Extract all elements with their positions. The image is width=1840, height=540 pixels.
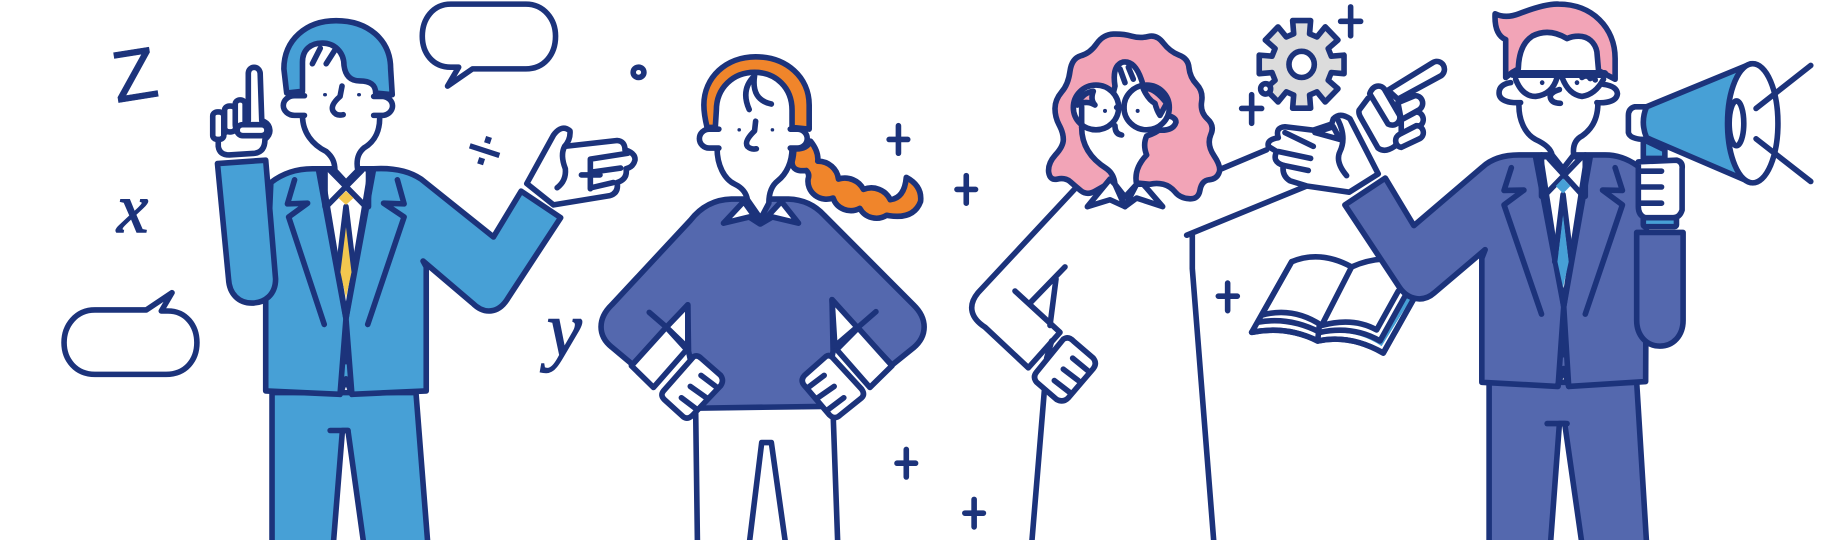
glasses <box>1513 70 1605 78</box>
trousers <box>1489 382 1647 540</box>
nose <box>1550 90 1560 103</box>
neck <box>1519 103 1598 169</box>
ears <box>1499 83 1521 103</box>
left cuff <box>631 327 687 387</box>
megaphone cone <box>1643 64 1751 183</box>
ears <box>283 96 304 115</box>
ear <box>1160 115 1176 130</box>
hair <box>1049 34 1220 199</box>
eyes <box>323 93 327 96</box>
speech bubble: top <box>422 4 556 86</box>
speech bubble: left <box>64 293 197 374</box>
megaphone cap <box>1628 107 1647 139</box>
left sleeve <box>217 160 276 303</box>
character: man in purple suit with megaphone <box>1345 4 1811 540</box>
raised hand <box>1268 115 1378 192</box>
hand on hip <box>1034 338 1095 401</box>
eyes <box>1103 109 1107 113</box>
math letter x: x <box>116 171 148 248</box>
wrist band <box>1643 217 1676 227</box>
collar <box>724 201 760 224</box>
character: woman with orange braid <box>601 57 924 540</box>
book <box>1252 257 1413 353</box>
ears <box>699 129 719 148</box>
megaphone handle <box>1643 139 1665 158</box>
right hand <box>802 356 863 418</box>
tie <box>1557 215 1569 288</box>
raised hand <box>218 67 270 155</box>
hair band <box>704 57 809 129</box>
glasses <box>1073 85 1119 130</box>
shirt <box>321 169 371 319</box>
lapels <box>1504 168 1542 314</box>
shirt <box>1541 157 1587 307</box>
collar <box>1087 179 1125 207</box>
tie <box>340 227 352 298</box>
eyes <box>737 128 741 132</box>
pointing hand <box>1388 61 1444 99</box>
megaphone mouth <box>1728 64 1778 183</box>
left hand <box>662 356 722 418</box>
eyes <box>1540 80 1544 85</box>
megaphone sleeve <box>1637 232 1683 346</box>
sound lines <box>1756 65 1811 181</box>
trousers <box>696 410 838 540</box>
plus signs <box>889 126 983 527</box>
braid <box>792 141 921 218</box>
tie knot <box>1556 178 1570 194</box>
coat lines <box>972 188 1076 368</box>
hand on megaphone <box>1638 160 1682 218</box>
trousers <box>272 393 428 540</box>
character: man in blue suit <box>213 21 561 540</box>
math letter y: y <box>540 286 582 373</box>
character: woman with pink hair <box>972 34 1378 540</box>
nose <box>747 121 756 149</box>
lapels <box>287 180 324 324</box>
nose <box>332 86 343 115</box>
jacket <box>266 169 561 394</box>
right cuff <box>837 328 892 387</box>
hair <box>1495 4 1615 79</box>
neck <box>717 148 792 219</box>
hair <box>284 21 392 95</box>
plus signs near gear and book <box>1218 7 1361 311</box>
nose <box>1115 126 1122 135</box>
neck <box>302 115 380 183</box>
math letter Z: Z <box>106 34 165 126</box>
man's gesturing hand <box>527 128 635 205</box>
tie knot <box>338 191 353 205</box>
division sign: ÷ <box>458 113 511 189</box>
icon: gear <box>1259 21 1344 108</box>
jacket <box>1345 155 1647 386</box>
small ring <box>633 67 644 77</box>
sweater <box>601 199 924 408</box>
face <box>1082 62 1160 197</box>
